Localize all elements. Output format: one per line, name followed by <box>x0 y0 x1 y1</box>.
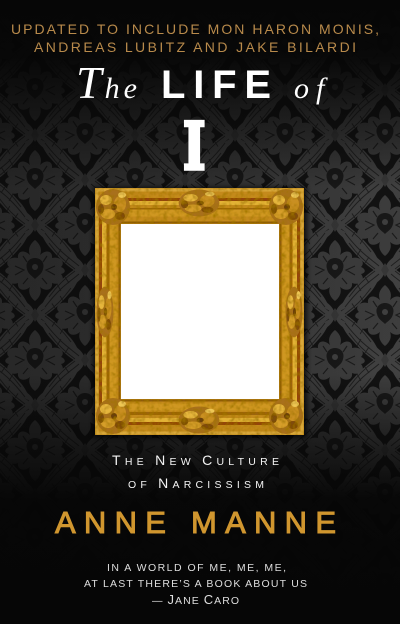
quote: — JANE CARO <box>152 592 239 607</box>
blank mirror <box>121 224 279 399</box>
frame moulding <box>95 188 304 435</box>
quote <box>84 562 307 607</box>
title: The <box>76 57 141 108</box>
corner ornaments <box>96 189 130 225</box>
edge ornaments <box>179 190 219 216</box>
tagline: ANDREAS LUBITZ AND JAKE BILARDI <box>34 39 356 55</box>
subtitle: OF N ARCISSISM <box>128 475 264 491</box>
author: ANNE MANNE <box>55 505 336 540</box>
gilded picture frame <box>93 187 307 438</box>
title <box>76 57 331 185</box>
tagline: UPDATED TO INCLUDE MON HARON MONIS, <box>11 21 379 37</box>
frame shadow <box>93 187 307 438</box>
quote: IN A WORLD OF ME, ME, ME, <box>107 562 286 574</box>
tagline <box>11 21 379 55</box>
subtitle <box>112 452 279 491</box>
quote: AT LAST THERE’S A BOOK ABOUT US <box>84 578 307 590</box>
subtitle: T HE N EW C ULTURE <box>112 452 279 468</box>
title: LIFE <box>161 63 271 107</box>
title: of <box>294 72 331 105</box>
title: I <box>183 109 206 185</box>
